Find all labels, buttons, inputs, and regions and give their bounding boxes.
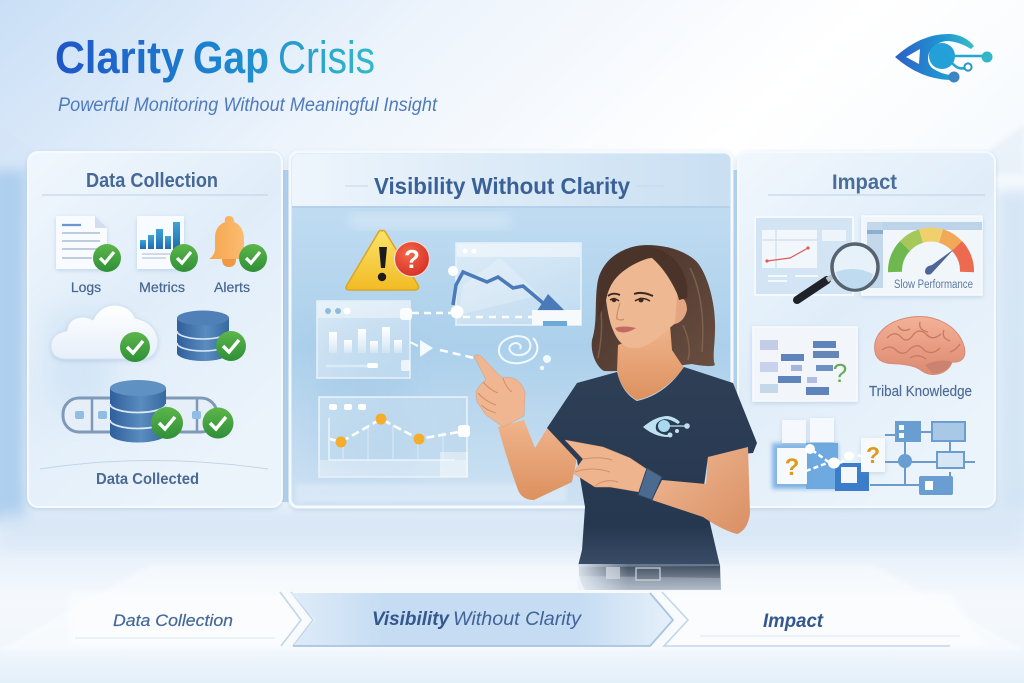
- icon: warning triangle with question mark: [346, 230, 430, 290]
- card: dashboard under magnifier: [755, 217, 853, 295]
- icon: magnifying glass: [797, 244, 878, 300]
- icon: database: [177, 310, 246, 361]
- diagram: fragmented system map: [772, 418, 975, 495]
- nose and lips: [615, 303, 636, 332]
- connector: dashed arrow links: [400, 308, 474, 358]
- subtitle: Powerful Monitoring Without Meaningful Insight: [58, 95, 438, 116]
- card: flow diagram with question mark: ?: [833, 358, 847, 388]
- process strip: [70, 592, 985, 646]
- icon: brain: [875, 317, 965, 374]
- step: visibility without clarity: Without Clarity: [453, 609, 583, 630]
- eyes and brows: [608, 293, 653, 302]
- hair front: [598, 247, 688, 318]
- diagram: fragmented system map: ?: [866, 442, 880, 468]
- label: metrics: Metrics: [139, 279, 185, 295]
- title: [55, 32, 375, 83]
- chart: bar chart window: [317, 301, 410, 378]
- label: slow performance: Slow Performance: [894, 279, 973, 291]
- belt: [578, 564, 721, 590]
- step: data collection: Data Collection: [113, 611, 233, 630]
- step: impact: Impact: [763, 611, 824, 632]
- icon: log document: [56, 216, 121, 272]
- diagram: fragmented system map: ?: [785, 454, 799, 481]
- label: data collected: Data Collected: [96, 471, 199, 488]
- card: slow performance gauge: [862, 216, 982, 295]
- title: Crisis: [278, 32, 375, 83]
- hand: pointing: [474, 355, 525, 427]
- panel heading: visibility without clarity: Visibility Without Clarity: [374, 173, 630, 199]
- panel: visibility without clarity: [290, 152, 732, 507]
- panel heading: data collection: Data Collection: [86, 170, 218, 192]
- icon: confusion spiral: [499, 336, 551, 370]
- label: logs: Logs: [71, 279, 101, 295]
- panel heading: impact: Impact: [832, 171, 897, 194]
- card: flow diagram with question mark: [753, 327, 857, 401]
- neck: [617, 325, 684, 400]
- icon: metrics chart: [137, 216, 198, 272]
- arm: pointing arm: [498, 420, 577, 500]
- icon: warning triangle with question mark: ?: [404, 244, 420, 274]
- label: alerts: Alerts: [214, 279, 250, 295]
- icon: alert bell: [209, 216, 267, 272]
- chart: line chart window: [319, 397, 470, 477]
- label: tribal knowledge: Tribal Knowledge: [869, 383, 972, 400]
- arm: gesturing arm: [652, 447, 750, 534]
- step: impact: [662, 592, 985, 646]
- step: visibility without clarity: Visibility: [372, 609, 450, 630]
- chart: falling trend window: [448, 243, 581, 326]
- watch: [638, 468, 662, 500]
- title: Clarity: [55, 32, 184, 83]
- panel: impact: [738, 152, 995, 507]
- icon: cloud: [51, 305, 158, 362]
- shirt: [547, 367, 757, 566]
- title: Gap: [193, 32, 269, 83]
- hair back: [592, 245, 715, 371]
- step: data collection: [70, 592, 313, 646]
- face: [606, 258, 679, 348]
- person: presenter pointing at the chart: [474, 245, 757, 590]
- panel: data collection: [28, 152, 282, 507]
- logo: eye with circuit nodes: [895, 34, 992, 82]
- shirt logo: [643, 416, 690, 438]
- hand: gesturing: [565, 440, 648, 493]
- gauge dial: [895, 235, 967, 272]
- step: visibility without clarity: [291, 593, 673, 646]
- icon: data pipeline with database: [63, 380, 234, 442]
